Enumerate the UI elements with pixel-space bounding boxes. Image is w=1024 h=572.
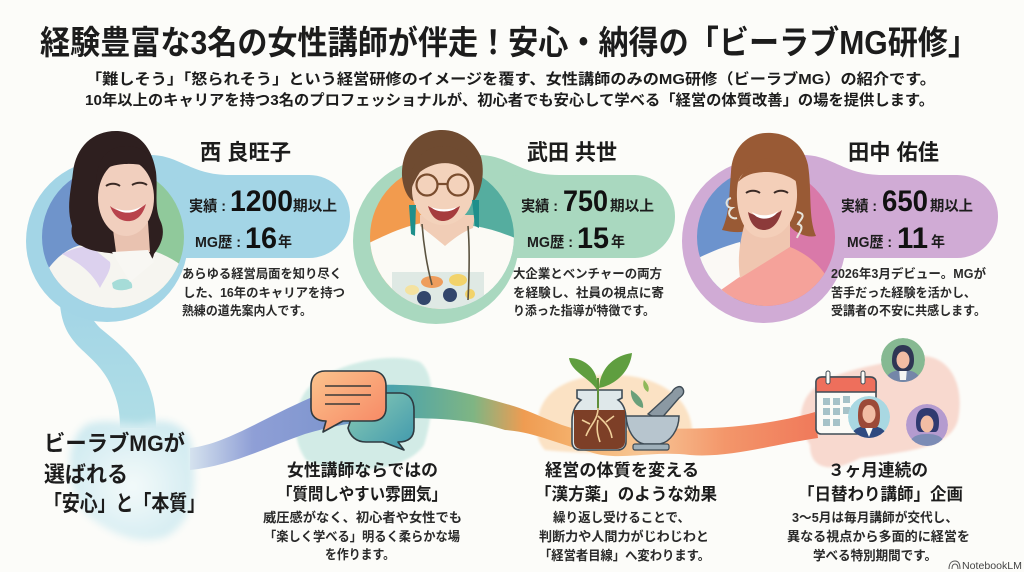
stat: 実績: 実績 : [521, 197, 558, 215]
description: 大企業とベンチャーの両方 [513, 266, 662, 281]
avatar right [906, 404, 948, 448]
neck [112, 222, 150, 252]
avatar front [848, 396, 890, 440]
icon: speech bubbles [311, 371, 414, 450]
heading: 「漢方薬」のような効果 [535, 484, 717, 504]
point: herbal effect [535, 461, 717, 563]
stat: 実績: 650 [882, 185, 928, 218]
stat: 実績: 実績 : [189, 197, 226, 215]
stat: MG歴: MG歴 : [195, 234, 241, 251]
watermark: NotebookLM [962, 560, 1022, 572]
description: を経験し、社員の視点に寄 [513, 285, 664, 300]
blob background [26, 155, 350, 322]
body: 学べる特別期間です。 [813, 548, 937, 563]
description: 受講者の不安に共感します。 [831, 303, 986, 318]
description: 2026年3月デビュー。MGが [831, 266, 986, 281]
description: あらゆる経営局面を知り尽く [182, 266, 342, 281]
heading: ３ヶ月連続の [828, 461, 928, 480]
stat: MG歴 [195, 222, 292, 255]
summary heading [44, 431, 205, 516]
stat: 実績: 期以上 [293, 198, 337, 215]
body [787, 510, 970, 563]
description: 苦手だった経験を活かし、 [831, 285, 976, 300]
stat: MG歴: 年 [278, 233, 292, 251]
bangs [97, 146, 155, 186]
watercolor blob: summary [70, 421, 194, 540]
stat: MG歴: 11 [897, 222, 928, 255]
stat: 実績 [521, 185, 654, 218]
subtitle: 10年以上のキャリアを持つ3名のプロフェッショナルが、初心者でも安心して学べる「経営の体質改善」の場を提供します。 [85, 91, 934, 109]
heading [535, 461, 717, 504]
stat: MG歴 [847, 222, 945, 255]
body: 判断力や人間力がじわじわと [539, 529, 709, 544]
body: を作ります。 [325, 547, 395, 562]
connector stem from first instructor to summary [60, 305, 156, 428]
summary heading: 選ばれる [44, 462, 128, 487]
body: 「経営者目線」へ変わります。 [539, 548, 710, 563]
name: 西 良旺子 [200, 140, 291, 165]
heading: 「質問しやすい雰囲気」 [277, 485, 447, 504]
stat: MG歴: 16 [245, 222, 277, 255]
stat: MG歴: 年 [931, 233, 945, 251]
hair [402, 130, 483, 201]
summary heading: 「安心」と「本質」 [44, 491, 205, 516]
body [263, 510, 462, 562]
body: 異なる視点から多面的に経営を [787, 529, 970, 544]
heading: 経営の体質を変える [545, 461, 699, 480]
face [412, 155, 474, 225]
heading [277, 461, 447, 504]
calendar [816, 371, 876, 434]
blob background [682, 155, 998, 323]
icon: herbal jar and mortar [569, 353, 684, 450]
flowing ribbon [190, 385, 818, 470]
avatar top [881, 338, 925, 385]
watercolor blob: herbal [537, 375, 692, 453]
name: 武田 共世 [527, 140, 617, 165]
panel: instructor 田中 佑佳 [682, 133, 998, 323]
stat: MG歴 [527, 222, 625, 255]
description: した、16年のキャリアを持つ [183, 285, 345, 300]
stat: MG歴: 年 [611, 233, 625, 251]
heading [798, 461, 963, 504]
subtitle [85, 70, 936, 109]
body: 3〜5月は毎月講師が交代し、 [792, 510, 958, 525]
body: 「楽しく学べる」明るく柔らかな場 [264, 529, 460, 544]
name: 田中 佑佳 [848, 140, 939, 165]
watercolor blob: calendar [801, 356, 960, 467]
stat: 実績: 1200 [230, 185, 293, 218]
point: rotating instructors [787, 461, 970, 563]
stat: MG歴: MG歴 : [527, 234, 573, 251]
blob background [353, 155, 675, 324]
stat: 実績: 期以上 [610, 198, 654, 215]
body: 繰り返し受けることで、 [553, 510, 690, 525]
stat: 実績: 750 [563, 185, 608, 218]
heading: 「日替わり講師」企画 [798, 484, 963, 504]
stat: 実績 [189, 185, 337, 218]
description: り添った指導が特徴です。 [513, 303, 655, 318]
point: atmosphere [263, 461, 462, 562]
panel: instructor 西 良旺子 [26, 131, 350, 322]
description [513, 266, 664, 318]
stat: 実績 [841, 185, 973, 218]
stat: 実績: 期以上 [930, 198, 973, 215]
summary heading: ビーラブMGが [44, 431, 185, 456]
hair [722, 133, 816, 237]
photo [365, 130, 520, 312]
stat: MG歴: MG歴 : [847, 234, 892, 251]
body [539, 510, 710, 563]
body: 威圧感がなく、初心者や女性でも [263, 510, 462, 525]
panel: instructor 武田 共世 [353, 130, 675, 324]
stat: MG歴: 15 [577, 222, 609, 255]
hair back [69, 131, 163, 263]
watercolor blob: speech [295, 358, 432, 470]
stat: 実績: 実績 : [841, 197, 877, 215]
description: 熟練の道先案内人です。 [182, 303, 312, 318]
neck [739, 222, 790, 278]
photo [40, 131, 190, 310]
icon: calendar and instructors [816, 338, 948, 448]
description [831, 266, 986, 318]
photo [690, 133, 835, 312]
face [737, 166, 797, 238]
heading: 女性講師ならではの [287, 461, 438, 480]
description [182, 266, 345, 318]
subtitle: 「難しそう」「怒られそう」という経営研修のイメージを覆す、女性講師のみのMG研修（ビーラブMG）の紹介です。 [86, 70, 936, 88]
face [98, 160, 154, 236]
